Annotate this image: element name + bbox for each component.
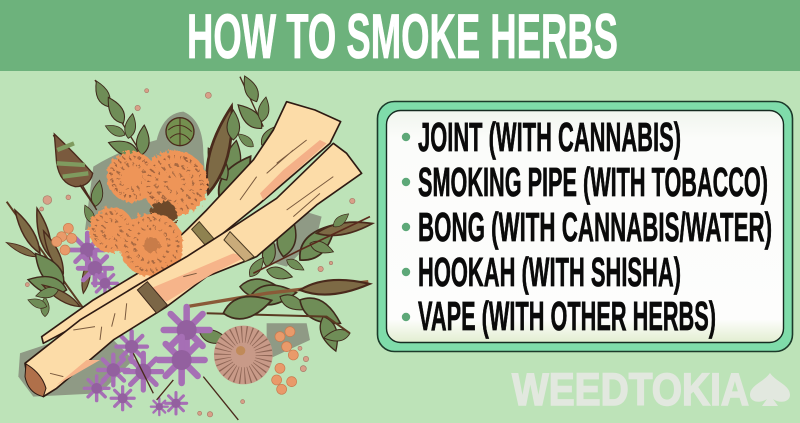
foliage: right sprigs [187, 211, 373, 354]
panel frame [378, 102, 792, 352]
list item: hookah [402, 249, 681, 295]
foliage: left sprig [5, 202, 93, 317]
header band [0, 0, 800, 72]
scattered petals [25, 89, 355, 417]
broken end of stick [25, 364, 46, 397]
orange puff flowers [89, 151, 208, 277]
icon: round green bud [166, 118, 194, 146]
panel: list of methods [378, 102, 792, 352]
band on back stick [192, 222, 215, 246]
front wooden stick [25, 143, 362, 397]
foliage: upper stems [53, 73, 282, 225]
watermark: WEEDTOKIA [512, 364, 749, 415]
purple flowers [70, 233, 238, 420]
back wooden stick [42, 102, 341, 343]
icon: cone bud [54, 134, 95, 207]
bands on front stick [224, 232, 254, 262]
panel inner [386, 110, 784, 342]
illustration: herb bundle [5, 73, 373, 420]
pink daisy flower [214, 326, 273, 384]
orange blossoms [52, 223, 298, 394]
list item: joint [402, 114, 681, 160]
shadow behind bundle [18, 112, 322, 397]
icon: spade [750, 373, 790, 406]
